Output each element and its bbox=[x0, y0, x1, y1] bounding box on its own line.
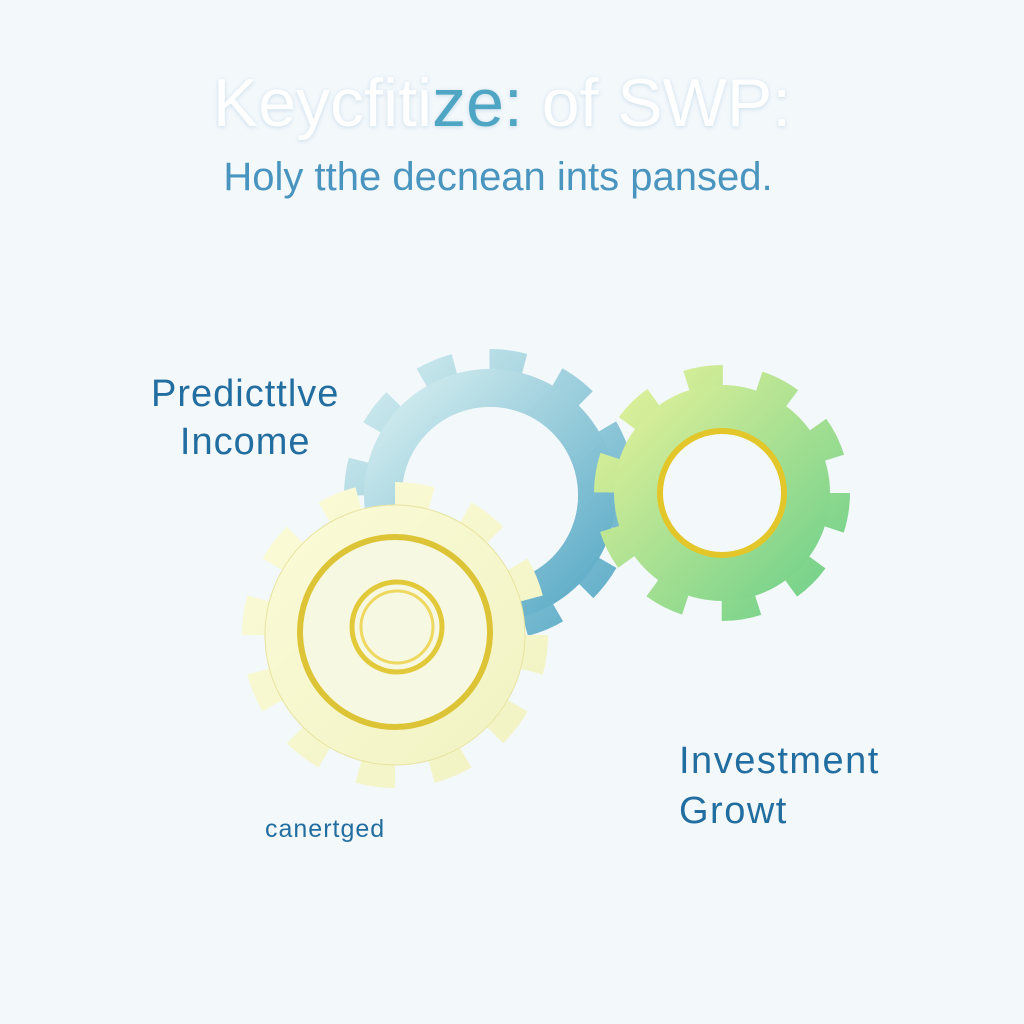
subtitle: Holy tthe decnean ints pansed. bbox=[223, 155, 773, 199]
label: investment growth: Investment bbox=[679, 740, 880, 782]
title: Keycfitize: of SWP: bbox=[213, 65, 791, 141]
label: predictive income: Income bbox=[180, 421, 311, 463]
label: predictive income bbox=[151, 373, 339, 463]
label: investment growth: Growt bbox=[679, 790, 788, 832]
gear: yellow bbox=[254, 494, 536, 776]
gear: green bbox=[605, 376, 839, 610]
gear: blue bbox=[355, 360, 625, 630]
label: canertged: canertged bbox=[265, 815, 385, 843]
label: predictive income: Predicttlve bbox=[151, 373, 339, 415]
label: investment growth bbox=[679, 740, 880, 832]
